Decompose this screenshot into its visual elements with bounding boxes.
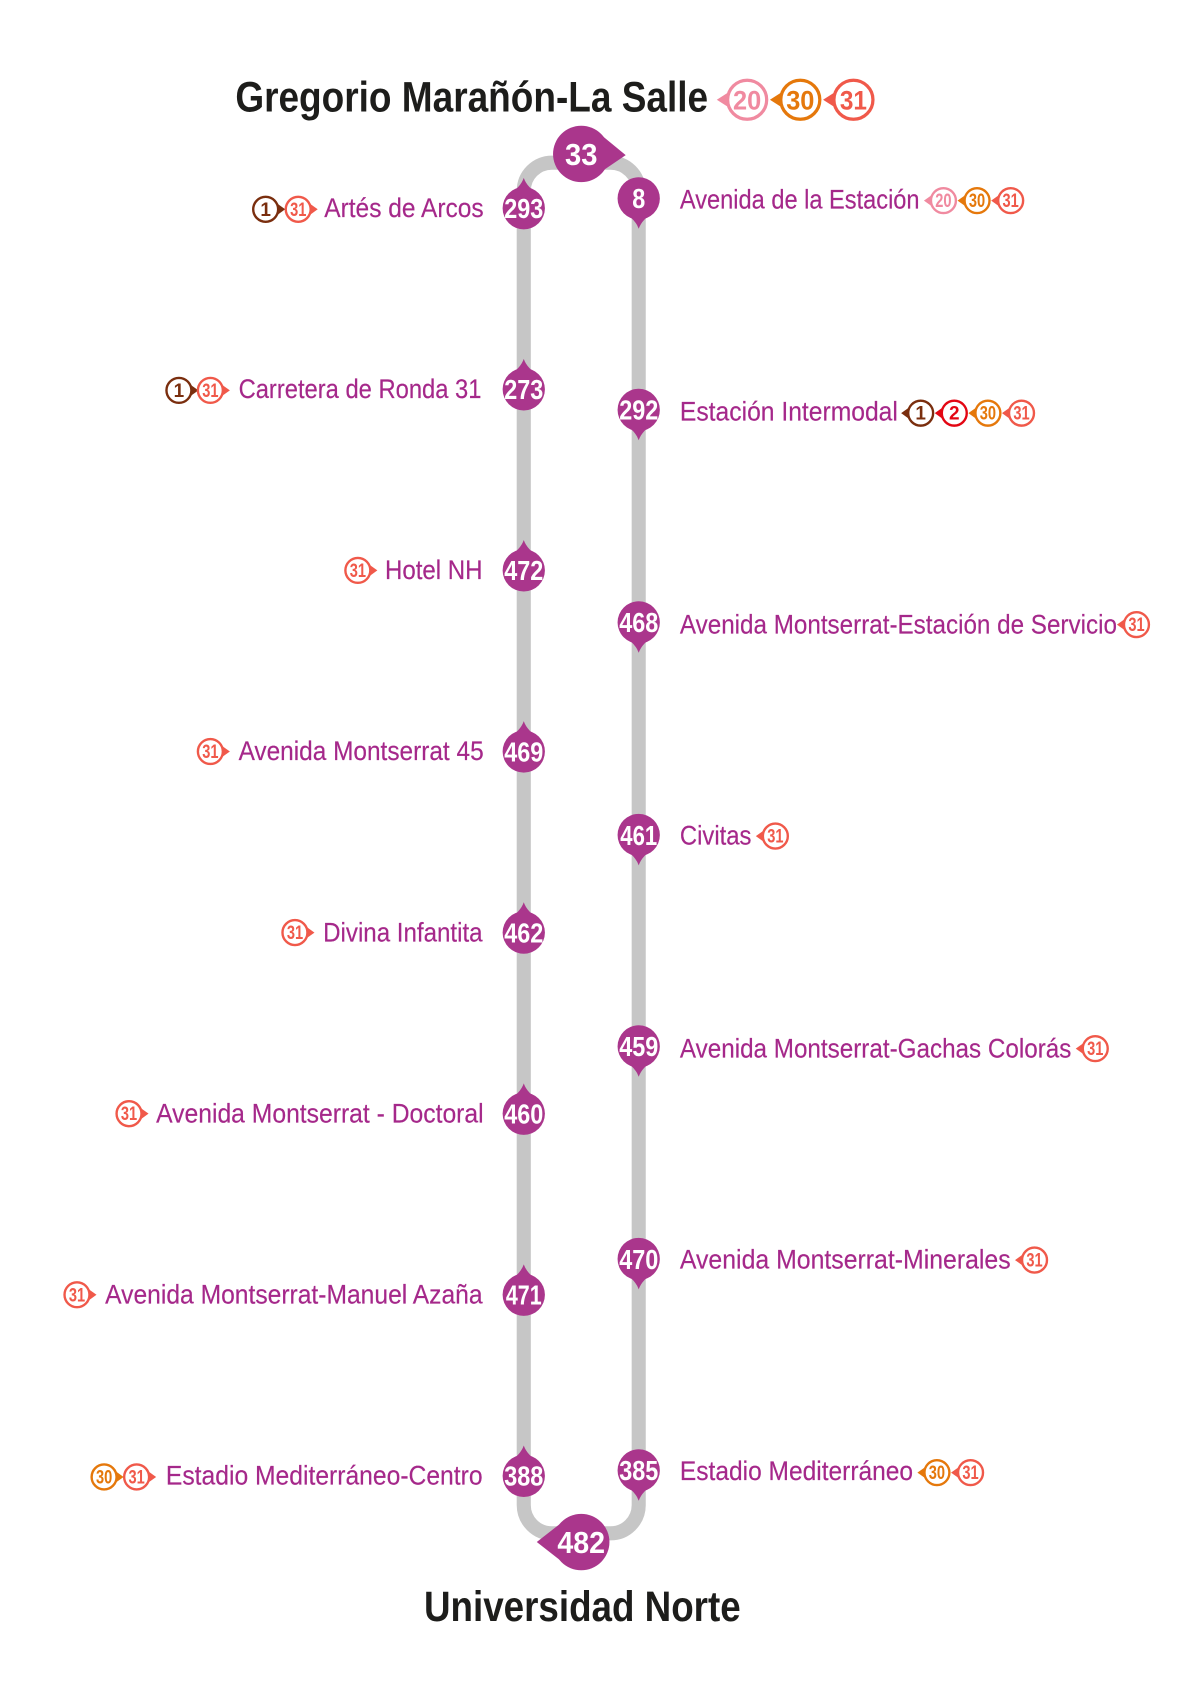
stop 293: Artés de Arcos: Artés de Arcos <box>324 193 484 223</box>
stop 468: Avenida Montserrat-Estación de Servicio: 31 <box>1128 615 1145 636</box>
stop 385: Estadio Mediterráneo <box>618 1449 983 1501</box>
stop 461: Civitas: 31 <box>767 827 784 848</box>
stop 273: Carretera de Ronda 31: 273 <box>504 373 543 405</box>
large connection badges <box>717 80 873 119</box>
stop 462: Divina Infantita: 31 <box>287 923 303 944</box>
stop 388: Estadio Mediterráneo-Centro: Estadio Mediterráneo-Centro <box>166 1461 483 1491</box>
stop 469: Avenida Montserrat 45: 31 <box>202 742 219 763</box>
stop 471: Avenida Montserrat-Manuel Azaña: 471 <box>506 1279 542 1311</box>
stop 292: Estación Intermodal: 31 <box>1013 404 1030 425</box>
stop 292: Estación Intermodal: 30 <box>980 404 996 425</box>
stop 472: Hotel NH: Hotel NH <box>385 555 483 585</box>
stop 273: Carretera de Ronda 31 <box>166 359 545 410</box>
stop 470: Avenida Montserrat-Minerales: 31 <box>1026 1251 1043 1272</box>
stop 469: Avenida Montserrat 45 <box>198 721 545 773</box>
terminal stop 33: 33 <box>565 139 598 172</box>
stop 468: Avenida Montserrat-Estación de Servicio <box>618 601 1149 653</box>
title: destination stop: Universidad Norte <box>424 1583 741 1630</box>
stop 385: Estadio Mediterráneo: Estadio Mediterráneo <box>680 1456 913 1486</box>
title: origin stop: Gregorio Marañón-La Salle <box>235 74 708 121</box>
terminal stop 33 <box>553 126 626 182</box>
stop 273: Carretera de Ronda 31: 31 <box>202 381 219 402</box>
stop 471: Avenida Montserrat-Manuel Azaña: Avenida Montserrat-Manuel Azaña <box>105 1279 483 1309</box>
stop 292: Estación Intermodal: 292 <box>619 394 658 426</box>
stop 388: Estadio Mediterráneo-Centro <box>92 1446 545 1497</box>
stop 468: Avenida Montserrat-Estación de Servicio: Avenida Montserrat-Estación de Servicio <box>680 609 1117 639</box>
large connection badges: 30 <box>786 85 814 116</box>
stop 460: Avenida Montserrat - Doctoral: 460 <box>504 1097 543 1129</box>
stop 385: Estadio Mediterráneo: 30 <box>929 1463 945 1484</box>
stop 468: Avenida Montserrat-Estación de Servicio: 468 <box>619 606 658 638</box>
stop 293: Artés de Arcos: 31 <box>290 200 307 221</box>
stop 293: Artés de Arcos: 293 <box>504 192 543 224</box>
stop 459: Avenida Montserrat-Gachas Colorás: 31 <box>1087 1039 1104 1060</box>
stop 293: Artés de Arcos <box>253 178 545 229</box>
stop 470: Avenida Montserrat-Minerales: Avenida Montserrat-Minerales <box>680 1245 1011 1275</box>
stop 388: Estadio Mediterráneo-Centro: 30 <box>96 1467 112 1488</box>
terminal stop 482: 482 <box>557 1527 605 1560</box>
route line <box>524 163 639 1533</box>
stop 471: Avenida Montserrat-Manuel Azaña: 31 <box>69 1285 85 1306</box>
stop 292: Estación Intermodal: 2 <box>949 404 960 425</box>
stop 292: Estación Intermodal: Estación Intermodal <box>680 397 898 427</box>
stop 292: Estación Intermodal: 1 <box>915 404 926 425</box>
stop 459: Avenida Montserrat-Gachas Colorás <box>618 1025 1108 1077</box>
stop 462: Divina Infantita: Divina Infantita <box>323 917 483 947</box>
stop 293: Artés de Arcos: 1 <box>260 200 271 221</box>
stop 461: Civitas: 461 <box>620 819 657 851</box>
stop 469: Avenida Montserrat 45: Avenida Montserrat 45 <box>239 736 484 766</box>
stop 8: Avenida de la Estación <box>618 177 1023 229</box>
stop 459: Avenida Montserrat-Gachas Colorás: Avenida Montserrat-Gachas Colorás <box>680 1033 1071 1063</box>
stop 273: Carretera de Ronda 31: Carretera de Ronda 31 <box>239 374 481 404</box>
stop 292: Estación Intermodal <box>618 389 1034 440</box>
stop 461: Civitas <box>618 814 788 865</box>
stop 471: Avenida Montserrat-Manuel Azaña <box>65 1264 545 1316</box>
stop 472: Hotel NH: 31 <box>350 561 366 582</box>
stop 8: Avenida de la Estación: 20 <box>935 191 952 212</box>
stop 470: Avenida Montserrat-Minerales: 470 <box>619 1243 658 1275</box>
stop 8: Avenida de la Estación: 8 <box>632 182 645 214</box>
stop 385: Estadio Mediterráneo: 31 <box>962 1463 979 1484</box>
stop 460: Avenida Montserrat - Doctoral: Avenida Montserrat - Doctoral <box>156 1098 484 1128</box>
stop 461: Civitas: Civitas <box>680 821 751 851</box>
stop 472: Hotel NH: 472 <box>504 554 543 586</box>
stop 472: Hotel NH <box>345 540 545 592</box>
stop 8: Avenida de la Estación: Avenida de la Estación <box>680 185 920 215</box>
stop 388: Estadio Mediterráneo-Centro: 388 <box>504 1460 543 1492</box>
stop 469: Avenida Montserrat 45: 469 <box>504 735 543 767</box>
stop 388: Estadio Mediterráneo-Centro: 31 <box>129 1467 145 1488</box>
stop 460: Avenida Montserrat - Doctoral <box>117 1083 545 1135</box>
large connection badges: 31 <box>840 85 867 116</box>
stop 273: Carretera de Ronda 31: 1 <box>174 381 185 402</box>
stop 462: Divina Infantita: 462 <box>504 916 543 948</box>
large connection badges: 20 <box>733 85 761 116</box>
stop 8: Avenida de la Estación: 30 <box>969 191 985 212</box>
stop 8: Avenida de la Estación: 31 <box>1003 191 1019 212</box>
stop 459: Avenida Montserrat-Gachas Colorás: 459 <box>619 1030 658 1062</box>
stop 385: Estadio Mediterráneo: 385 <box>619 1454 658 1486</box>
stop 470: Avenida Montserrat-Minerales <box>618 1238 1047 1289</box>
stop 460: Avenida Montserrat - Doctoral: 31 <box>121 1104 138 1125</box>
terminal stop 482 <box>537 1514 609 1570</box>
stop 462: Divina Infantita <box>282 902 545 954</box>
